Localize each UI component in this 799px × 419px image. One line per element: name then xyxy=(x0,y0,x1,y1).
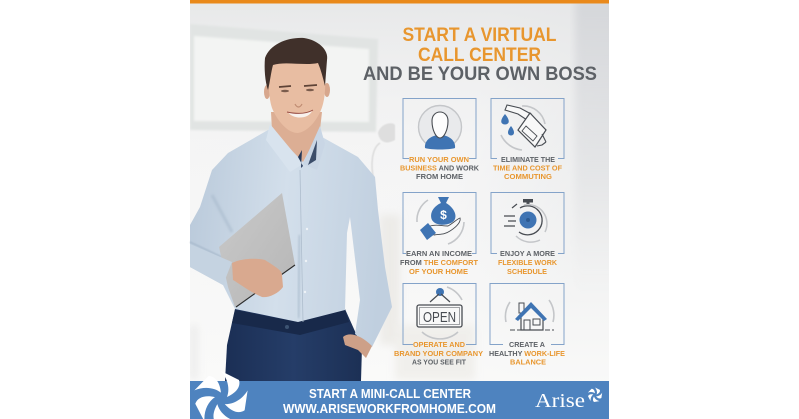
Arise logo: Arise xyxy=(535,390,585,412)
caption: FROM HOME xyxy=(416,172,463,181)
panel: run your own business xyxy=(400,98,479,181)
icon: person xyxy=(418,106,462,150)
caption: ELIMINATE THE xyxy=(501,155,555,164)
caption: EARN AN INCOME xyxy=(406,249,472,258)
title xyxy=(363,24,597,85)
banner text: WWW.ARISEWORKFROMHOME.COM xyxy=(283,401,496,416)
caption: BUSINESS AND WORK xyxy=(400,164,479,172)
banner text xyxy=(283,386,496,416)
caption: FLEXIBLE WORK xyxy=(498,258,557,267)
caption: HEALTHY WORK-LIFE xyxy=(489,349,565,358)
caption: COMMUTING xyxy=(504,172,552,181)
chair and furniture xyxy=(190,215,475,380)
panel: open sign xyxy=(394,284,483,366)
person holding a laptop xyxy=(190,38,392,381)
collar xyxy=(266,124,303,172)
caption: OF YOUR HOME xyxy=(409,267,468,276)
icon: open sign: OPEN xyxy=(423,310,456,326)
caption xyxy=(493,155,562,181)
panel: eliminate commuting xyxy=(491,98,564,181)
panel: earn an income xyxy=(400,192,478,276)
top orange bar xyxy=(190,0,609,4)
banner text: START A MINI-CALL CENTER xyxy=(309,386,472,401)
trousers xyxy=(225,309,362,381)
title: CALL CENTER xyxy=(418,44,541,66)
caption xyxy=(498,249,557,276)
panel: flexible schedule xyxy=(491,192,564,276)
laptop xyxy=(219,193,295,307)
Arise logo xyxy=(535,387,604,412)
caption: FROM THE COMFORT xyxy=(400,258,478,267)
window frame xyxy=(190,24,378,132)
neck xyxy=(271,112,322,162)
title: AND BE YOUR OWN BOSS xyxy=(363,63,597,85)
icon: Arise swirl large xyxy=(194,373,248,419)
icon: stopwatch xyxy=(504,199,547,242)
caption: RUN YOUR OWN xyxy=(409,155,469,164)
caption xyxy=(489,340,565,366)
caption: BRAND YOUR COMPANY xyxy=(394,349,483,358)
caption: TIME AND COST OF xyxy=(493,164,562,172)
icon: fuel nozzle xyxy=(501,105,546,150)
caption: ENJOY A MORE xyxy=(500,249,555,258)
icon: house xyxy=(505,300,554,330)
ears xyxy=(264,85,270,99)
right hand in pocket xyxy=(343,334,372,358)
caption xyxy=(400,249,478,276)
hair xyxy=(265,38,327,90)
desk lamp xyxy=(372,123,395,180)
face xyxy=(269,56,325,133)
caption: SCHEDULE xyxy=(507,267,547,276)
caption: OPERATE AND xyxy=(413,340,465,349)
caption: AS YOU SEE FIT xyxy=(412,358,466,366)
footer banner xyxy=(190,371,609,419)
title: START A VIRTUAL xyxy=(402,24,557,46)
caption: CREATE A xyxy=(509,340,545,349)
shirt xyxy=(190,130,392,347)
icon: money bag and hand: $ xyxy=(440,208,447,222)
caption xyxy=(394,340,483,366)
panel: work-life balance xyxy=(489,284,565,366)
cuff and left hand xyxy=(190,244,232,285)
photo background: office interior xyxy=(190,4,609,381)
caption: BALANCE xyxy=(510,358,546,366)
caption xyxy=(400,155,479,181)
